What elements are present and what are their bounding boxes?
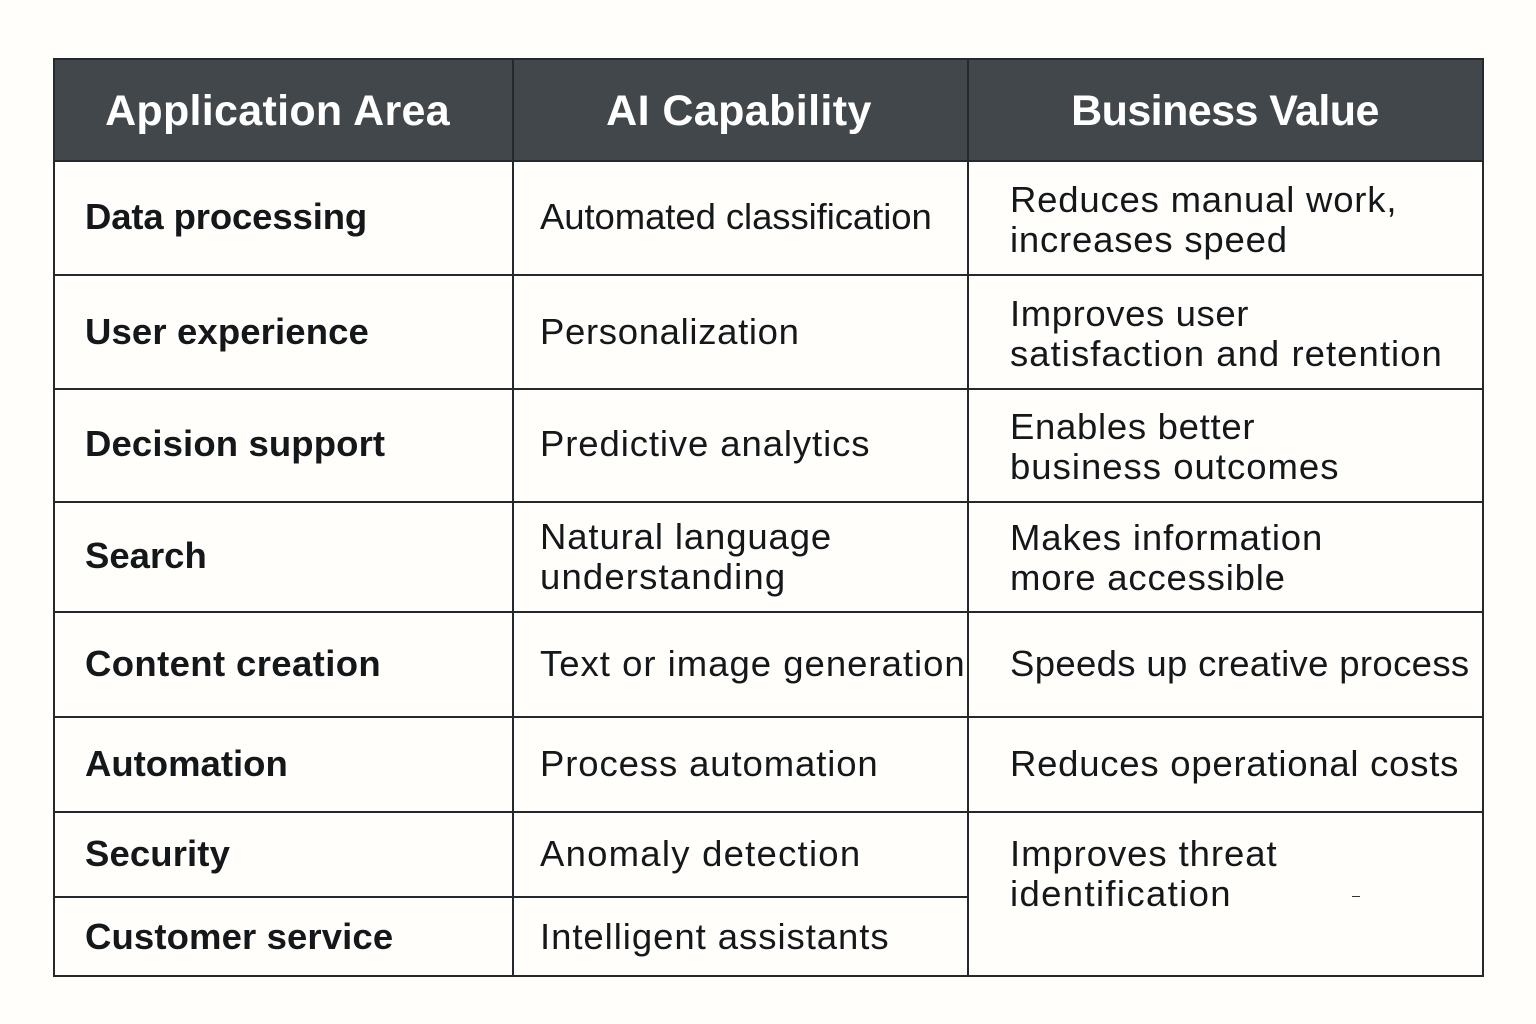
value: Enables better business outcomes: Enables better: [1010, 406, 1255, 447]
heading: Application Area: Application Area: [105, 86, 450, 134]
value: Improves user satisfaction: [1010, 293, 1443, 374]
value: Enables better business outcomes: business outcomes: [1010, 446, 1339, 487]
value: Speeds up creative process: Speeds up creative process: [1010, 643, 1470, 684]
row: Decision support: Decision support: [85, 423, 385, 464]
value: Improves threat identification: identification: [1010, 873, 1232, 914]
capability: Anomaly detection: Anomaly detection: [540, 833, 861, 874]
value: Reduces operational costs: Reduces operational costs: [1010, 743, 1459, 784]
value: Makes information more accessible: Makes information: [1010, 517, 1323, 558]
row: Search: Search: [85, 535, 207, 576]
capability: Text or image generation: Text or image generation: [540, 643, 966, 684]
value: Makes information more accessible: [1010, 517, 1323, 598]
capability: Personalization: Personalization: [540, 311, 800, 352]
capability: Natural language understanding: Natural language: [540, 516, 832, 557]
row: Automation: Automation: [85, 743, 288, 784]
capability: Automated classification: Automated classification: [540, 196, 932, 237]
value: Makes information more accessible: more accessible: [1010, 557, 1286, 598]
heading: AI Capability: AI Capability: [606, 86, 872, 134]
capability: Natural language understanding: understanding: [540, 556, 786, 597]
value: Improves threat identification: [1010, 833, 1278, 914]
stray dash mark: [1352, 896, 1360, 897]
value: Improves threat identification: Improves threat: [1010, 833, 1278, 874]
value: Reduces manual work: Reduces manual work,: [1010, 179, 1397, 220]
row: Security: Security: [85, 833, 230, 874]
row: Data processing: Data processing: [85, 196, 367, 237]
capability: Intelligent assistants: Intelligent assistants: [540, 916, 890, 957]
capability: Process automation: Process automation: [540, 743, 879, 784]
header row background: [53, 58, 1484, 161]
capability: Predictive analytics: Predictive analytics: [540, 423, 870, 464]
value: Reduces manual work: [1010, 179, 1397, 260]
row: User experience: User experience: [85, 311, 369, 352]
row: Content creation: Content creation: [85, 643, 381, 684]
capability: Natural language understanding: [540, 516, 832, 597]
value: Reduces manual work: increases speed: [1010, 219, 1288, 260]
row: Customer service: Customer service: [85, 916, 393, 957]
value: Improves user satisfaction: Improves user: [1010, 293, 1249, 334]
heading: Business Value: Business Value: [1071, 86, 1379, 134]
value: Improves user satisfaction: satisfaction and retention: [1010, 333, 1443, 374]
value: Enables better business outcomes: [1010, 406, 1339, 487]
